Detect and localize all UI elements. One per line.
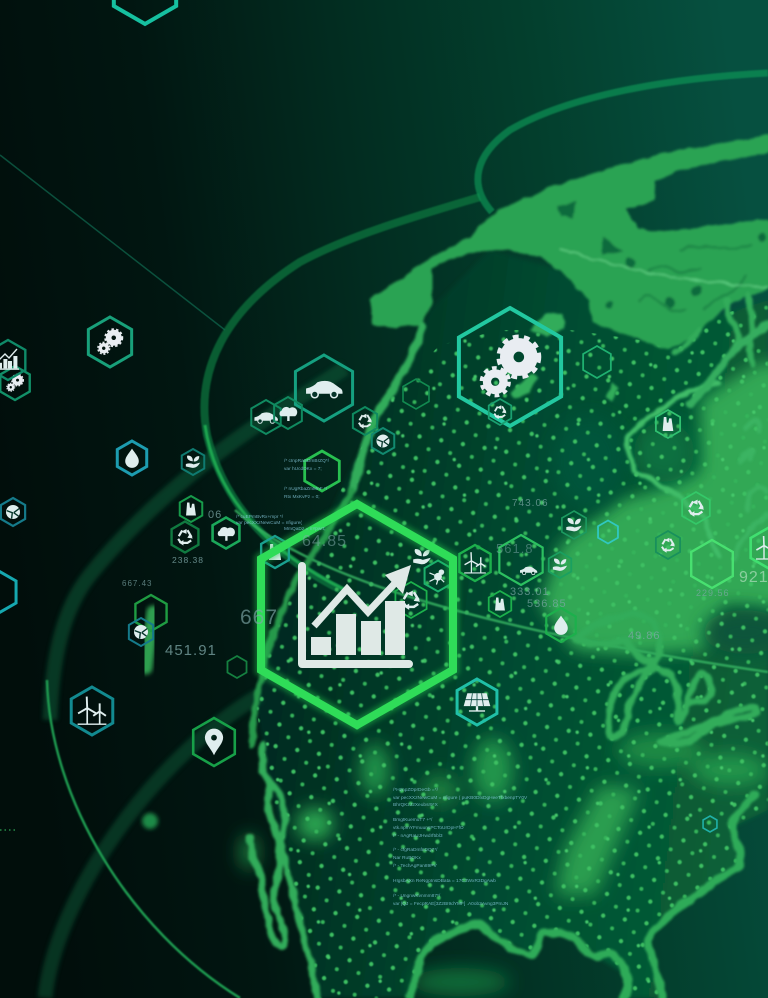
hex chart far left [0, 340, 25, 380]
floating numbers: 743.06 [512, 498, 549, 509]
code block lower: var |QJ = FecpRAE[3Z2BI9dYMF] .A0ob3Avng3PmJN [393, 901, 509, 907]
code block lower [393, 787, 528, 907]
code block lower: HIgsbAXn ReNgpInsDBata = 17C3WxR3DgAwb [393, 878, 496, 884]
arctic thin line [560, 250, 768, 287]
hex recycle far right [656, 531, 680, 559]
chart arrow [314, 565, 411, 626]
code block upper: var hUcdDKx = 7; [284, 466, 322, 472]
code block lower: Nar RuBOKx [393, 855, 421, 861]
hex gears left [88, 317, 132, 367]
hex factory centre [261, 536, 289, 568]
hex hand leaf [182, 449, 204, 475]
code block upper [236, 458, 330, 532]
floating numbers: 06 [208, 509, 222, 521]
arctic filled mass [372, 138, 768, 347]
land base [255, 250, 768, 998]
floating numbers: 561.8 [496, 541, 534, 556]
hex recycle centre [395, 582, 427, 618]
hex empty green [135, 595, 167, 631]
hex dim [403, 379, 429, 409]
arc: inner bright lower part [205, 425, 345, 590]
hex globe left [1, 498, 25, 526]
floating numbers: 229.56 [696, 588, 730, 598]
floating numbers: 238.38 [172, 555, 204, 565]
arc: top ring [478, 73, 768, 212]
lake erie ontario [660, 707, 757, 744]
hex turbine centre [459, 545, 491, 581]
floating numbers: 921 [739, 569, 768, 586]
hex bright right [691, 540, 733, 588]
dark patch east [703, 610, 768, 654]
icon plant [413, 549, 431, 564]
hudson bay dark water [634, 422, 694, 482]
gulf coast [410, 925, 628, 998]
main hex glow [261, 504, 453, 725]
midwest glow [241, 732, 768, 996]
code block upper: MmQaDz = nYpwrt; [284, 526, 326, 532]
code block upper: Rtx MxKvPz = 0; [284, 494, 320, 500]
hex car centre [499, 535, 543, 585]
hex car small [251, 400, 281, 434]
canada glow [540, 360, 768, 655]
pacific coast lower [262, 745, 318, 998]
floating numbers: 64.85 [302, 533, 347, 550]
thin line across [235, 510, 768, 672]
hex recycle right [682, 492, 710, 524]
blobs near gears [510, 313, 618, 402]
hex turbine edge [751, 528, 768, 568]
floating numbers: 536.85 [527, 598, 567, 610]
hex tiny teal [703, 816, 717, 832]
hex factory [180, 496, 202, 522]
hex cyan small [598, 520, 618, 544]
arctic strands [675, 296, 753, 365]
main hex outline [261, 504, 453, 725]
east coast [648, 795, 755, 998]
code block upper: var pecXXzNewCuM = nfigure( [236, 520, 302, 526]
hex recycle upper [353, 407, 377, 435]
coastline and arctic shapes [250, 138, 768, 998]
small spot [142, 813, 158, 829]
arctic holes [557, 202, 767, 309]
pacific coast through hex [252, 490, 352, 745]
hex globe lower [129, 618, 153, 646]
hex drop lower [546, 608, 576, 642]
dark patch west of hudson [554, 416, 626, 508]
hex solar [457, 679, 497, 725]
hex cyan edge [0, 570, 16, 614]
lake huron [656, 667, 712, 722]
code block lower: BmgtKuemuT7 +*/ [393, 817, 433, 823]
hex top [114, 0, 176, 24]
dotted globe land [250, 250, 768, 998]
arctic swirl texture [640, 245, 750, 312]
lake michigan [608, 666, 654, 736]
hex car large [295, 355, 353, 421]
left blob [146, 612, 153, 668]
arc: thin line to the bottom [47, 680, 240, 998]
code block lower: /*HznpZDprDeGb =*/ [393, 787, 439, 793]
hex cloud small [274, 397, 302, 429]
hex recycle by gears [489, 399, 511, 425]
pacific coast upper [352, 325, 423, 490]
code block lower: BhrQKzJ2Xeubsr9*X [393, 802, 439, 808]
hex pin [193, 718, 235, 766]
hex leaf centre [549, 552, 571, 578]
hudson north coast [690, 325, 768, 403]
code block lower: /* - cfgRaDmfnDQ7*/ [393, 847, 438, 853]
code block upper: /* cInpRaSDmBrZQ*/ [284, 458, 330, 464]
hex leaf right [562, 511, 586, 539]
hex factory lower [489, 591, 511, 617]
glowing land masses [142, 360, 768, 996]
code block lower: vtk.npmYFmuunsPCToUrDpH*fO [393, 825, 464, 831]
code block upper: /* cuEPmBvRx+mpr */ [236, 514, 284, 520]
code block lower: /* - UngnwKvnmm87*/ [393, 893, 441, 899]
hex recycle [172, 522, 198, 552]
lake superior [577, 613, 660, 662]
thin diagonal [0, 155, 225, 330]
hudson coast [627, 382, 720, 555]
main hexagon with growth chart [261, 504, 453, 725]
floating numbers: 667.43 [122, 579, 152, 588]
east islands [735, 421, 768, 560]
hex turbine [71, 687, 113, 735]
hex dim right [583, 346, 611, 378]
small dots left [0, 829, 18, 831]
floating numbers: 451.91 [165, 642, 217, 659]
hex gears far left [0, 366, 30, 400]
code block lower: /* - nAgRaUJHwdrf5bl3 [393, 833, 443, 839]
hex bright empty [305, 451, 339, 491]
hex small empty [227, 656, 247, 678]
hex gears large [459, 308, 561, 426]
arc: outer wide band [50, 368, 345, 720]
arc: inner band [204, 197, 480, 592]
baja loop [250, 785, 285, 947]
floating numbers: 333.01 [510, 586, 550, 598]
hex factory right [656, 410, 680, 438]
code block lower: /* - TechAgPan89PV [393, 863, 437, 869]
hex cloud [213, 518, 239, 548]
arc: lower band [45, 695, 260, 998]
code block lower: var pecXXzNewCuM = nfigure ( puKB0DlxDgHeeTfxbenpTY0V [393, 795, 528, 801]
chart axes [302, 566, 409, 664]
floating numbers: 49.86 [628, 630, 661, 642]
floating numbers: 667 [240, 606, 278, 629]
hex drop [117, 441, 147, 475]
hex bug [425, 560, 451, 592]
floating numbers [122, 498, 768, 659]
code block upper: /* nUgRbaZmMnF */ [284, 486, 328, 492]
hex globe upper [372, 428, 394, 454]
chart bars [311, 601, 405, 655]
